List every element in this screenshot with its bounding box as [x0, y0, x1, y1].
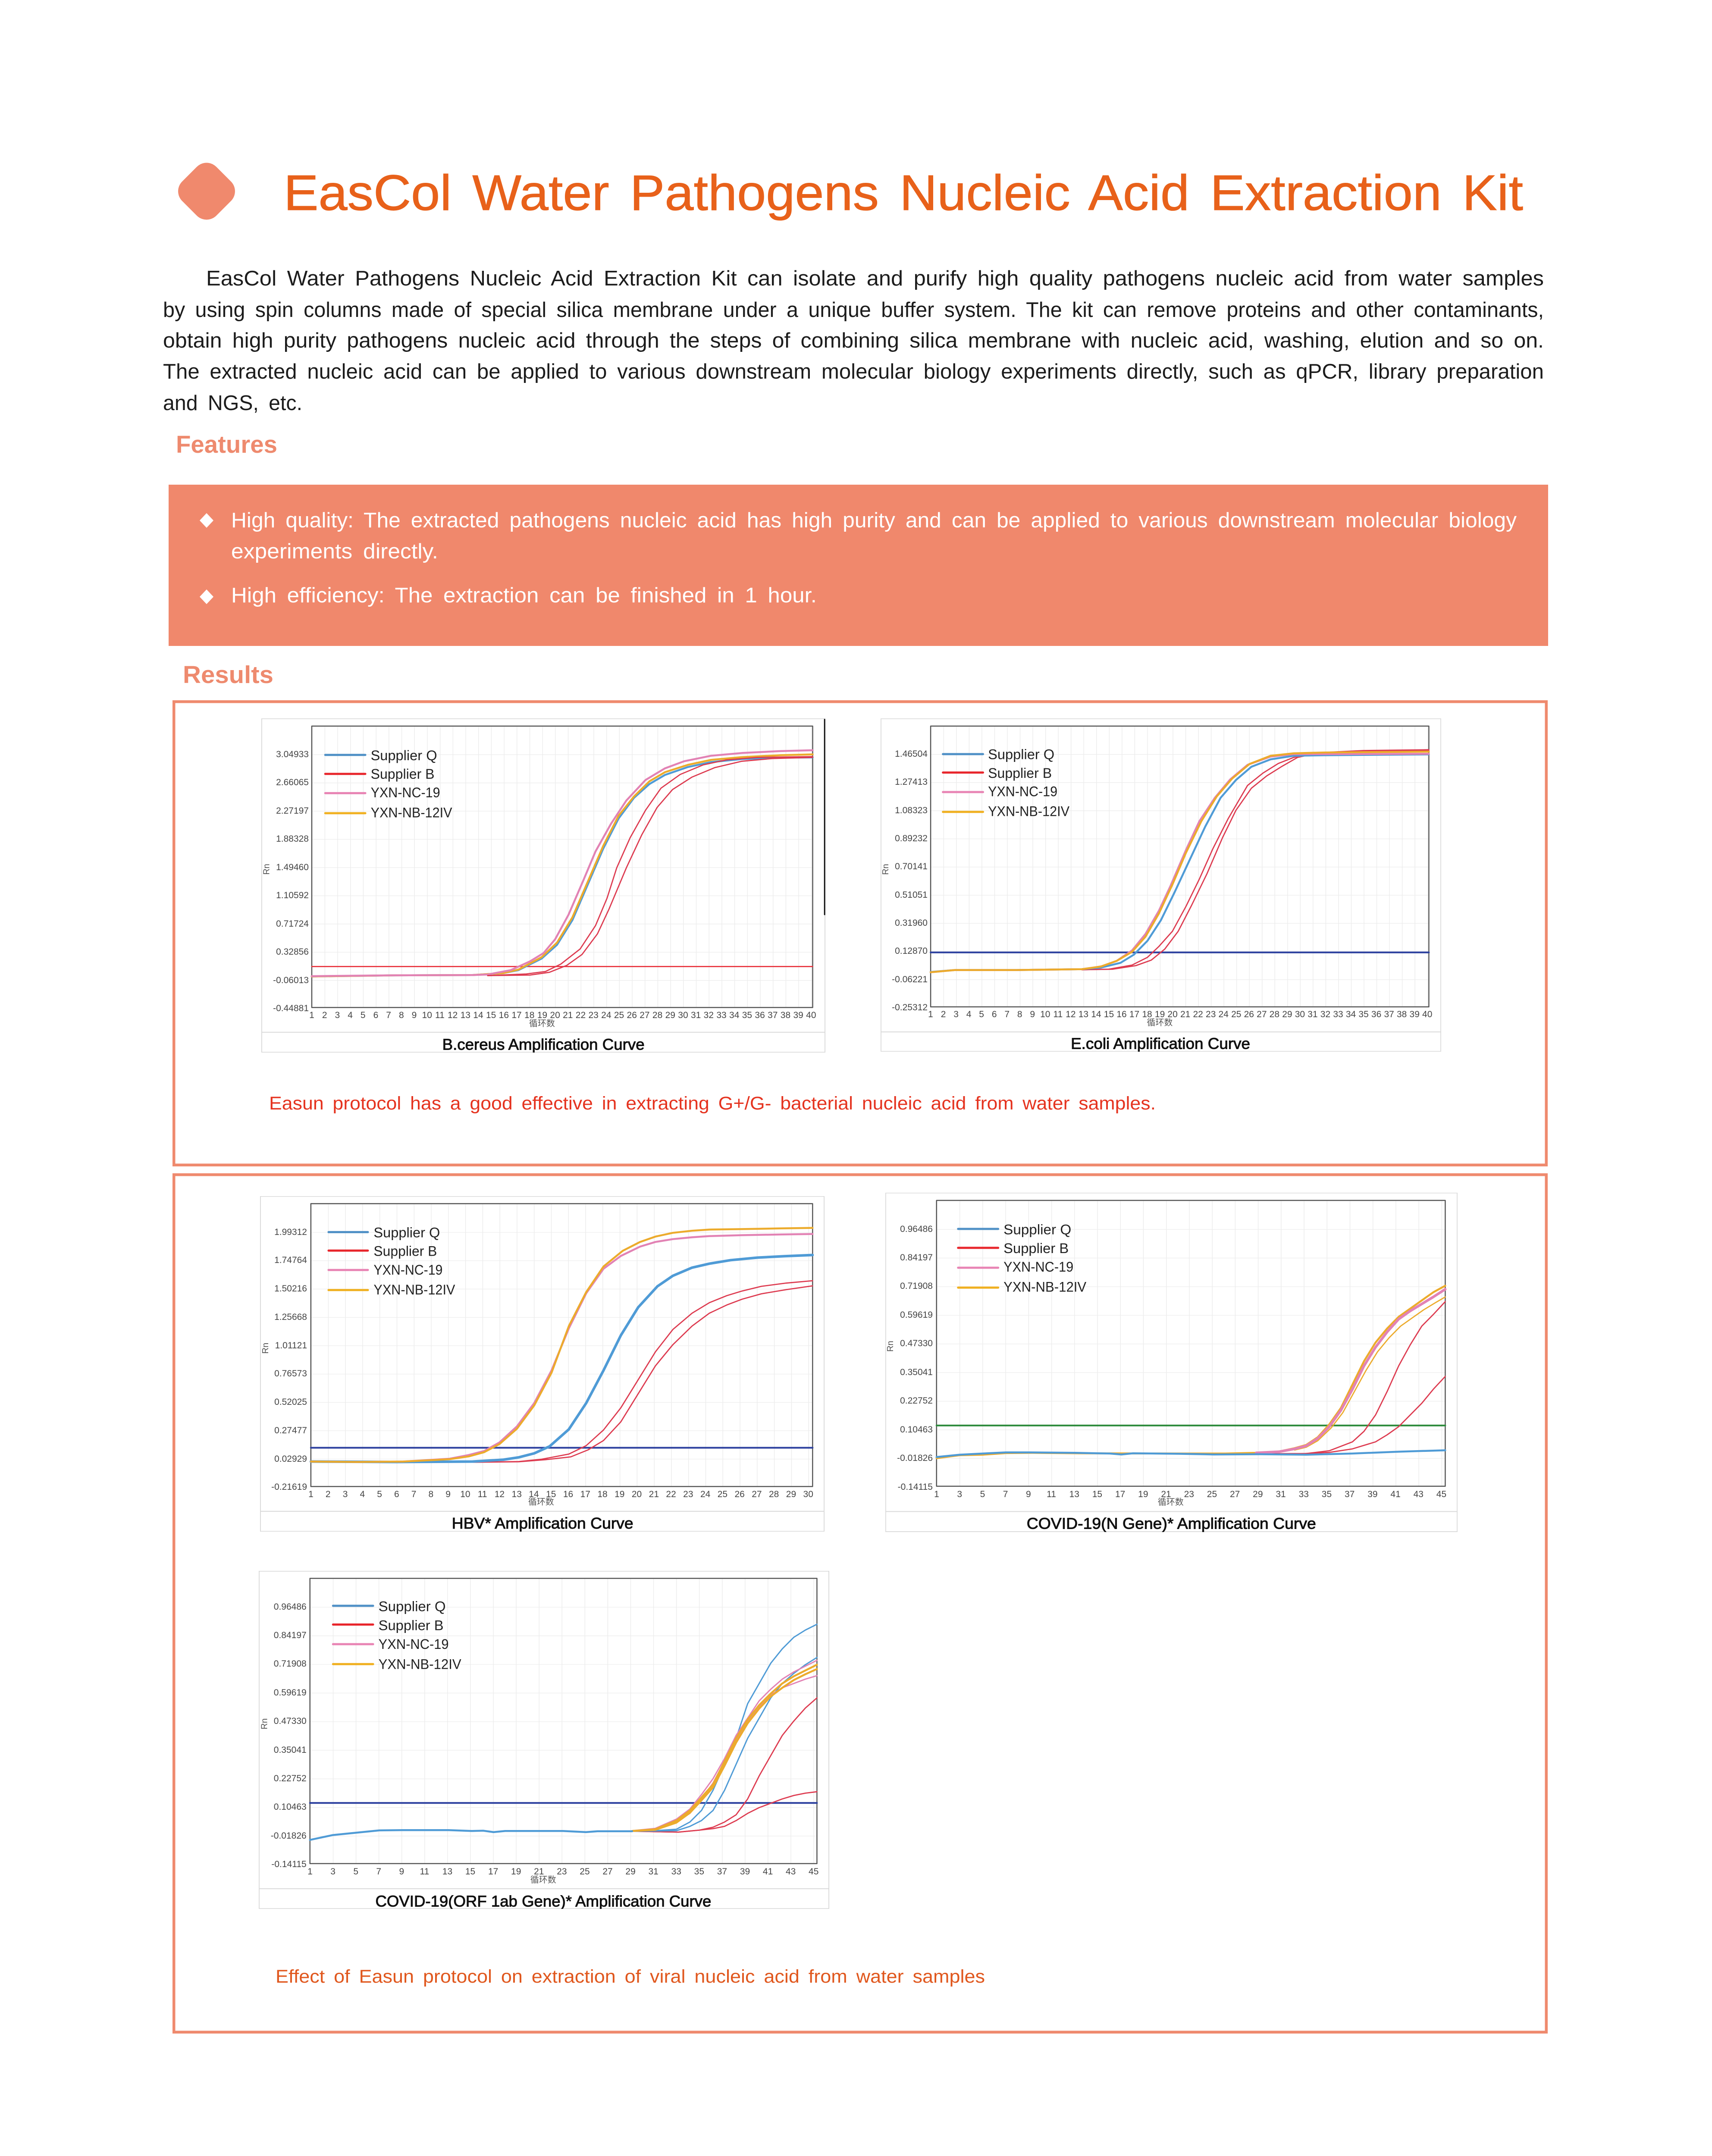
x axis ticks C: 24 [700, 1489, 710, 1499]
y axis ticks D: 0.59619 [900, 1310, 933, 1320]
x axis ticks D: 23 [1184, 1489, 1194, 1499]
x axis ticks A: 36 [755, 1010, 765, 1020]
legend D: Supplier B [1003, 1241, 1069, 1256]
x axis ticks B: 6 [992, 1009, 997, 1019]
plot E [259, 1571, 829, 1909]
chart: B.cereus amplification curve [261, 718, 825, 1053]
x axis ticks B: 27 [1257, 1009, 1267, 1019]
axis titles B: Rn [881, 864, 890, 875]
y axis ticks B: 0.12870 [895, 946, 928, 956]
intro paragraph: The extracted nucleic acid can be applied to various downstream molecular biology experiments directly, such as qPCR, library preparation [163, 360, 1544, 383]
legend C: Supplier Q [373, 1225, 440, 1240]
y axis ticks E: 0.71908 [274, 1659, 307, 1669]
x axis ticks B: 8 [1017, 1009, 1022, 1019]
x axis ticks E: 39 [740, 1867, 750, 1877]
legend E: YXN-NB-12IV [379, 1657, 461, 1672]
intro paragraph [163, 267, 1544, 415]
x axis ticks C: 19 [615, 1489, 624, 1499]
x axis ticks C: 23 [683, 1489, 693, 1499]
x axis ticks B: 13 [1079, 1009, 1088, 1019]
x axis ticks B: 32 [1320, 1009, 1330, 1019]
axis titles A: Rn [262, 864, 272, 875]
legend C: Supplier B [373, 1244, 437, 1259]
axis titles E: 循环数 [530, 1875, 556, 1885]
x axis ticks C: 14 [529, 1489, 539, 1499]
x axis ticks B: 17 [1129, 1009, 1139, 1019]
x axis ticks E: 31 [649, 1867, 658, 1877]
y axis ticks B: 1.08323 [895, 805, 928, 815]
legend C: YXN-NB-12IV [373, 1282, 455, 1297]
plot B [881, 718, 1441, 1052]
x axis ticks B: 36 [1371, 1009, 1381, 1019]
x axis ticks B: 23 [1206, 1009, 1216, 1019]
x axis ticks A: 21 [563, 1010, 573, 1020]
x axis ticks A: 2 [322, 1010, 327, 1020]
legend E: Supplier B [379, 1617, 444, 1633]
axis titles D [886, 1341, 1184, 1507]
intro paragraph: EasCol Water Pathogens Nucleic Acid Extraction Kit can isolate and purify high quality pathogens nucleic acid from water samples [206, 267, 1544, 290]
x axis ticks B: 10 [1040, 1009, 1050, 1019]
y axis ticks D: 0.35041 [900, 1367, 933, 1377]
x axis ticks B: 37 [1384, 1009, 1394, 1019]
axis titles B: 循环数 [1147, 1018, 1173, 1028]
legend B: YXN-NC-19 [988, 783, 1057, 799]
panel: viral results [172, 1173, 1548, 2034]
y axis ticks E: 0.35041 [274, 1745, 307, 1755]
x axis ticks C: 1 [308, 1489, 314, 1499]
x axis ticks A: 33 [716, 1010, 727, 1020]
icon: rounded diamond [172, 157, 241, 226]
y axis ticks B: 0.31960 [895, 918, 928, 928]
axis titles D: 循环数 [1158, 1497, 1184, 1507]
x axis ticks A: 40 [806, 1010, 816, 1020]
x axis ticks A: 11 [435, 1010, 445, 1020]
x axis ticks B: 30 [1295, 1009, 1305, 1019]
y axis ticks B: 0.89232 [895, 834, 928, 843]
y axis ticks C: 0.27477 [274, 1426, 307, 1435]
x axis ticks E [310, 1867, 814, 1877]
y axis ticks B [881, 754, 928, 1008]
caption C: HBV* Amplification Curve [452, 1514, 633, 1532]
chart: E.coli amplification curve: 1.46504 [895, 749, 928, 759]
x axis ticks A: 1 [309, 1010, 314, 1020]
legend A [325, 748, 452, 820]
x axis ticks A: 5 [361, 1010, 366, 1020]
x axis ticks A: 35 [742, 1010, 752, 1020]
x axis ticks C: 18 [597, 1489, 608, 1499]
x axis ticks D: 25 [1207, 1489, 1217, 1499]
legend A: YXN-NC-19 [371, 785, 440, 800]
y axis ticks E [259, 1607, 307, 1865]
x axis ticks C: 26 [734, 1489, 745, 1499]
x axis ticks B: 14 [1091, 1009, 1101, 1019]
x axis ticks C: 9 [445, 1489, 451, 1499]
x axis ticks E: 41 [763, 1867, 773, 1877]
y axis ticks C: 1.25668 [274, 1312, 307, 1322]
x axis ticks A: 29 [665, 1010, 675, 1020]
x axis ticks C: 3 [343, 1489, 348, 1499]
x axis ticks B: 39 [1410, 1009, 1420, 1019]
x axis ticks B: 34 [1346, 1009, 1356, 1019]
y axis ticks A: -0.44881 [273, 1003, 309, 1013]
panel: bacterial results [172, 700, 1548, 1166]
y axis ticks E: -0.01826 [271, 1831, 307, 1841]
x axis ticks E: 29 [625, 1867, 636, 1877]
panel: features [169, 485, 1548, 646]
x axis ticks D: 1 [934, 1489, 939, 1499]
legend B [943, 746, 1070, 819]
x axis ticks A: 31 [691, 1010, 701, 1020]
x axis ticks B: 19 [1155, 1009, 1165, 1019]
y axis ticks C: 1.01121 [275, 1341, 307, 1351]
plot D [885, 1193, 1458, 1532]
x axis ticks E: 9 [399, 1867, 404, 1877]
y axis ticks A: 0.71724 [276, 918, 309, 929]
x axis ticks D: 37 [1345, 1489, 1355, 1499]
y axis ticks C: -0.21619 [271, 1482, 307, 1492]
x axis ticks C: 2 [326, 1489, 331, 1499]
y axis ticks A: 2.27197 [276, 805, 309, 816]
x axis ticks B: 35 [1358, 1009, 1369, 1019]
x axis ticks D: 21 [1161, 1489, 1171, 1499]
y axis ticks E: 0.22752 [274, 1774, 307, 1783]
x axis ticks B: 9 [1030, 1009, 1035, 1019]
axis titles B [881, 864, 1173, 1028]
x axis ticks D: 11 [1047, 1489, 1056, 1499]
x axis ticks C: 21 [649, 1489, 659, 1499]
x axis ticks B: 28 [1270, 1009, 1279, 1019]
x axis ticks A: 28 [652, 1010, 662, 1020]
x axis ticks C [311, 1489, 809, 1500]
y axis ticks E: 0.10463 [274, 1802, 307, 1812]
caption D: COVID-19(N Gene)* Amplification Curve [1027, 1514, 1316, 1532]
x axis ticks C: 28 [769, 1489, 779, 1499]
x axis ticks A: 8 [399, 1010, 404, 1020]
x axis ticks E: 25 [580, 1867, 590, 1877]
x axis ticks A: 6 [373, 1010, 378, 1020]
y axis ticks C: 0.76573 [274, 1369, 307, 1379]
legend B: YXN-NB-12IV [988, 803, 1070, 819]
x axis ticks D: 13 [1069, 1489, 1079, 1499]
axis titles D: Rn [886, 1341, 895, 1352]
x axis ticks C: 12 [495, 1489, 505, 1499]
x axis ticks A: 7 [386, 1010, 391, 1020]
y axis ticks A [261, 755, 309, 1009]
y axis ticks D: 0.47330 [900, 1338, 933, 1348]
x axis ticks A: 38 [781, 1010, 790, 1020]
y axis ticks C: 0.02929 [274, 1454, 307, 1464]
y axis ticks A: -0.06013 [273, 975, 309, 985]
x axis ticks C: 30 [803, 1489, 813, 1499]
x axis ticks A: 27 [640, 1010, 650, 1020]
x axis ticks E: 27 [602, 1867, 613, 1877]
x axis ticks C: 5 [377, 1489, 382, 1499]
axis titles C [261, 1343, 554, 1507]
y axis ticks E: -0.14115 [271, 1859, 307, 1869]
chart: E.coli amplification curve [881, 718, 1441, 1052]
x axis ticks A: 10 [422, 1010, 432, 1020]
y axis ticks A: 1.10592 [276, 890, 309, 900]
x axis ticks D: 9 [1026, 1489, 1031, 1499]
x axis ticks E: 37 [717, 1867, 727, 1877]
x axis ticks D: 41 [1390, 1489, 1401, 1499]
x axis ticks B: 29 [1282, 1009, 1292, 1019]
plot A [261, 718, 825, 1053]
x axis ticks B: 16 [1116, 1009, 1127, 1019]
title: EasCol Water Pathogens Nucleic Acid Extraction Kit [284, 165, 1523, 221]
y axis ticks D: 0.84197 [900, 1253, 933, 1263]
x axis ticks C: 13 [512, 1489, 522, 1499]
x axis ticks C: 6 [394, 1489, 399, 1499]
x axis ticks A: 30 [678, 1010, 688, 1020]
y axis ticks A: 0.32856 [276, 947, 309, 957]
x axis ticks D: 43 [1414, 1489, 1424, 1499]
x axis ticks B: 38 [1397, 1009, 1407, 1019]
x axis ticks C: 22 [666, 1489, 676, 1499]
x axis ticks A: 3 [335, 1010, 340, 1020]
x axis ticks C: 29 [786, 1489, 796, 1499]
x axis ticks E: 1 [307, 1867, 313, 1877]
x axis ticks B: 33 [1333, 1009, 1343, 1019]
x axis ticks E: 17 [488, 1867, 498, 1877]
x axis ticks B: 4 [966, 1009, 971, 1019]
x axis ticks B: 7 [1004, 1009, 1010, 1019]
x axis ticks A: 18 [524, 1010, 534, 1020]
y axis ticks A: 1.49460 [276, 862, 309, 872]
legend D [958, 1222, 1087, 1294]
y axis ticks D: 0.22752 [900, 1396, 933, 1406]
axis titles E: Rn [260, 1718, 270, 1730]
x axis ticks C: 20 [632, 1489, 642, 1499]
y axis ticks D: -0.14115 [898, 1482, 933, 1492]
x axis ticks A: 9 [412, 1010, 417, 1020]
x axis ticks B: 40 [1422, 1009, 1432, 1019]
legend D: YXN-NB-12IV [1003, 1279, 1087, 1294]
x axis ticks B: 11 [1053, 1009, 1063, 1019]
axis titles A [262, 864, 555, 1028]
x axis ticks D: 29 [1253, 1489, 1263, 1499]
y axis ticks A: 2.66065 [276, 777, 309, 787]
x axis ticks D: 7 [1003, 1489, 1008, 1499]
x axis ticks B: 5 [979, 1009, 984, 1019]
y axis ticks D: -0.01826 [897, 1453, 933, 1463]
x axis ticks B: 3 [953, 1009, 959, 1019]
axis titles C: Rn [261, 1343, 270, 1354]
x axis ticks E: 21 [534, 1867, 544, 1877]
y axis ticks E: 0.47330 [274, 1716, 307, 1726]
x axis ticks A: 14 [473, 1010, 483, 1020]
y axis ticks B: -0.06221 [892, 975, 928, 984]
x axis ticks A: 37 [768, 1010, 778, 1020]
x axis ticks C: 25 [718, 1489, 727, 1499]
x axis ticks A: 23 [588, 1010, 599, 1020]
x axis ticks C: 11 [478, 1489, 487, 1499]
y axis ticks D: 0.10463 [900, 1425, 933, 1435]
x axis ticks B: 21 [1180, 1009, 1190, 1019]
x axis ticks E: 5 [353, 1867, 358, 1877]
x axis ticks E: 45 [809, 1867, 818, 1877]
heading: Features: Features [176, 431, 277, 458]
plot C [260, 1196, 825, 1532]
x axis ticks A: 25 [614, 1010, 624, 1020]
x axis ticks C: 4 [360, 1489, 365, 1499]
x axis ticks E: 15 [465, 1867, 475, 1877]
x axis ticks D [937, 1489, 1441, 1500]
x axis ticks D: 33 [1299, 1489, 1309, 1499]
x axis ticks A: 24 [601, 1010, 611, 1020]
x axis ticks A: 12 [448, 1010, 458, 1020]
x axis ticks E: 7 [376, 1867, 381, 1877]
chart: COVID-19 N gene amplification curve [885, 1193, 1458, 1532]
x axis ticks B: 12 [1066, 1009, 1076, 1019]
x axis ticks B: 25 [1231, 1009, 1241, 1019]
intro paragraph: by using spin columns made of special silica membrane under a unique buffer system. The kit can remove proteins and other contaminants, [163, 298, 1544, 322]
x axis ticks A: 32 [704, 1010, 714, 1020]
legend C: YXN-NC-19 [373, 1262, 442, 1278]
x axis ticks C: 16 [563, 1489, 573, 1499]
legend E [333, 1599, 461, 1672]
legend E: Supplier Q [379, 1599, 446, 1614]
bullet: high quality: High quality: The extracted pathogens nucleic acid has high purity and can be applied to various downstream molecular biology [231, 509, 1517, 532]
x axis ticks C: 7 [411, 1489, 416, 1499]
x axis ticks D: 17 [1115, 1489, 1125, 1499]
x axis ticks E: 11 [420, 1867, 429, 1877]
x axis ticks C: 8 [429, 1489, 433, 1499]
y axis ticks D: 0.71908 [900, 1281, 933, 1291]
intro paragraph: and NGS, etc. [163, 392, 302, 415]
y axis ticks A: 1.88328 [276, 834, 309, 844]
x axis ticks E: 23 [557, 1867, 567, 1877]
x axis ticks A: 19 [537, 1010, 547, 1020]
legend D: Supplier Q [1003, 1222, 1071, 1237]
x axis ticks C: 10 [460, 1489, 470, 1499]
x axis ticks B: 2 [941, 1009, 946, 1019]
x axis ticks A: 4 [348, 1010, 353, 1020]
y axis ticks D [885, 1229, 933, 1487]
x axis ticks A: 17 [511, 1010, 522, 1020]
x axis ticks A: 26 [627, 1010, 637, 1020]
chart: COVID-19 N gene amplification curve: 0.96486 [900, 1224, 933, 1234]
x axis ticks B: 18 [1142, 1009, 1152, 1019]
legend E: YXN-NC-19 [379, 1636, 449, 1652]
x axis ticks D: 31 [1276, 1489, 1286, 1499]
x axis ticks D: 15 [1092, 1489, 1102, 1499]
y axis ticks C: 1.74764 [274, 1255, 307, 1265]
x axis ticks B: 22 [1193, 1009, 1203, 1019]
chart: HBV amplification curve: 1.99312 [274, 1227, 307, 1237]
x axis ticks E: 3 [330, 1867, 336, 1877]
chart: COVID-19 ORF 1ab gene amplification curve: 0.96486 [274, 1602, 307, 1612]
chart: COVID-19 ORF 1ab gene amplification curve [259, 1571, 829, 1909]
x axis ticks A [312, 1010, 811, 1021]
x axis ticks E: 35 [694, 1867, 704, 1877]
x axis ticks A: 13 [461, 1010, 470, 1020]
y axis ticks B: 0.70141 [895, 862, 928, 871]
note: bacterial result: Easun protocol has a good effective in extracting G+/G- bacterial nucleic acid from water samples. [269, 1093, 1156, 1114]
y axis ticks C [260, 1232, 307, 1488]
x axis ticks C: 15 [546, 1489, 556, 1499]
legend C [329, 1225, 455, 1297]
y axis ticks C: 1.50216 [274, 1284, 307, 1294]
axis titles E [260, 1718, 556, 1885]
legend B: Supplier B [988, 765, 1052, 781]
y axis ticks C: 0.52025 [274, 1397, 307, 1407]
x axis ticks D: 19 [1138, 1489, 1148, 1499]
axis titles A: 循环数 [529, 1018, 555, 1028]
x axis ticks C: 27 [752, 1489, 762, 1499]
y axis ticks B: 1.27413 [895, 777, 928, 787]
bullet: high quality [200, 509, 1517, 563]
x axis ticks A: 34 [729, 1010, 739, 1020]
legend A: Supplier Q [371, 748, 437, 763]
intro paragraph: obtain high purity pathogens nucleic acid through the steps of combining silica membrane with nucleic acid, washing, elution and so on. [163, 329, 1544, 352]
x axis ticks D: 35 [1322, 1489, 1332, 1499]
bullet: high quality: experiments directly. [231, 540, 438, 563]
axis titles C: 循环数 [528, 1497, 554, 1507]
x axis ticks E: 43 [786, 1867, 796, 1877]
x axis ticks B: 20 [1167, 1009, 1178, 1019]
y axis ticks B: 0.51051 [895, 890, 928, 900]
heading: Results: Results [183, 661, 273, 689]
y axis ticks B: -0.25312 [892, 1003, 928, 1012]
note: viral result: Effect of Easun protocol on extraction of viral nucleic acid from water samples [276, 1966, 985, 1987]
x axis ticks A: 20 [550, 1010, 560, 1020]
x axis ticks D: 39 [1367, 1489, 1378, 1499]
x axis ticks D: 5 [980, 1489, 985, 1499]
x axis ticks B: 26 [1244, 1009, 1254, 1019]
chart: B.cereus amplification curve: 3.04933 [276, 749, 309, 759]
x axis ticks B: 15 [1104, 1009, 1114, 1019]
x axis ticks B [931, 1009, 1427, 1020]
x axis ticks A: 16 [499, 1010, 509, 1020]
x axis ticks B: 31 [1308, 1009, 1318, 1019]
x axis ticks A: 39 [793, 1010, 803, 1020]
x axis ticks E: 19 [511, 1867, 521, 1877]
x axis ticks B: 24 [1219, 1009, 1229, 1019]
x axis ticks C: 17 [580, 1489, 590, 1499]
legend D: YXN-NC-19 [1003, 1259, 1073, 1275]
bullet: high efficiency: High efficiency: The extraction can be finished in 1 hour. [231, 584, 817, 607]
x axis ticks E: 33 [671, 1867, 681, 1877]
chart: HBV amplification curve [260, 1196, 825, 1532]
x axis ticks D: 45 [1436, 1489, 1446, 1499]
y axis ticks E: 0.59619 [274, 1688, 307, 1698]
x axis ticks B: 1 [928, 1009, 933, 1019]
legend B: Supplier Q [988, 746, 1054, 762]
legend A: YXN-NB-12IV [371, 805, 452, 820]
y axis ticks E: 0.84197 [274, 1630, 307, 1640]
x axis ticks D: 27 [1230, 1489, 1240, 1499]
x axis ticks A: 22 [576, 1010, 586, 1020]
legend A: Supplier B [371, 766, 435, 782]
x axis ticks D: 3 [957, 1489, 962, 1499]
x axis ticks A: 15 [486, 1010, 496, 1020]
x axis ticks E: 13 [442, 1867, 452, 1877]
